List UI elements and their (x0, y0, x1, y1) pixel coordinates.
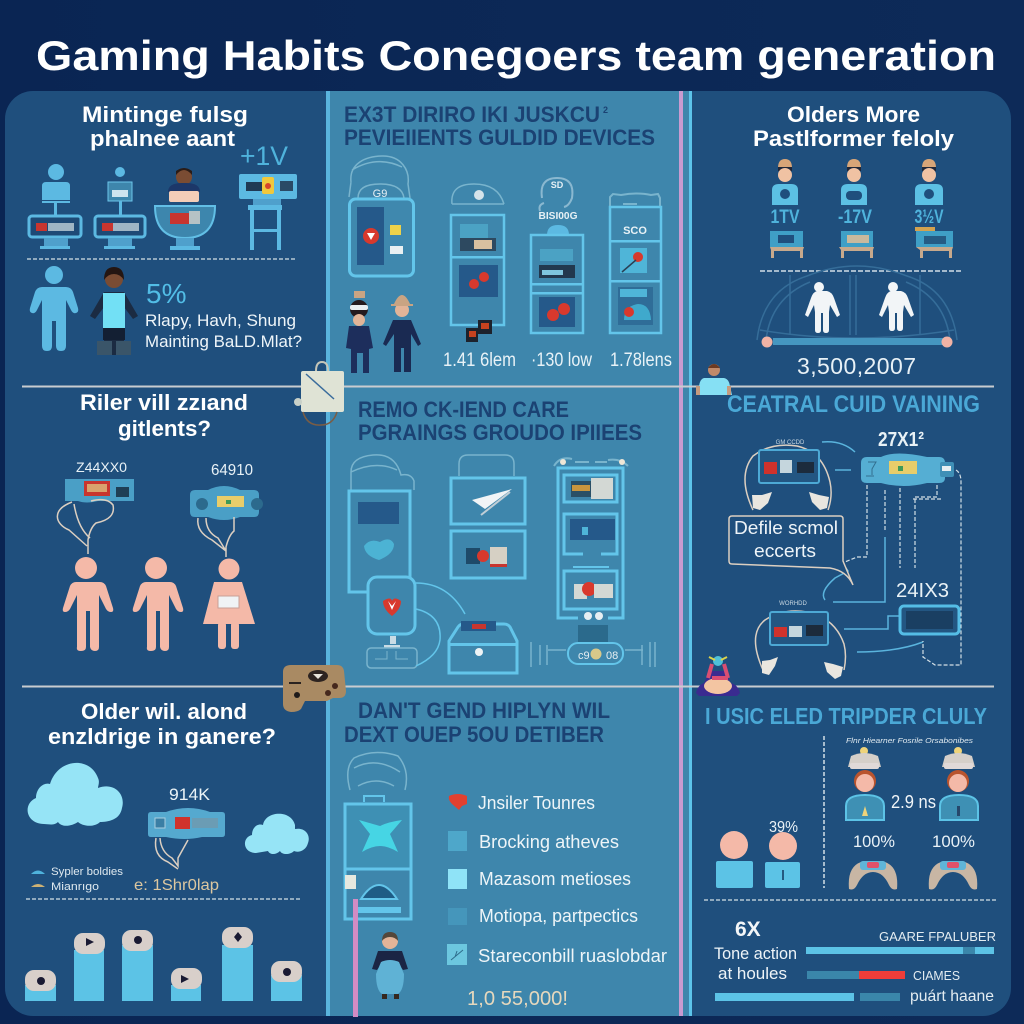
figures with monitors: -17V (838, 207, 872, 228)
icon: dark person (90, 267, 138, 355)
heading (753, 102, 955, 151)
legend (31, 866, 124, 893)
labels: 1.78lens (610, 350, 672, 371)
text block (714, 944, 797, 983)
icon: monitor on stool (239, 174, 297, 250)
device with cable (148, 808, 225, 869)
device 4: SCO (623, 225, 647, 237)
labels: 1.41 6lem (443, 350, 516, 371)
headset device top (745, 440, 831, 510)
text block: at houles (718, 964, 787, 983)
heading: EX3T DIRIRO IKI JUSKCU (344, 102, 600, 127)
item: Mazasom metioses: Mazasom metioses (479, 869, 631, 889)
panel: middle centre (349, 397, 655, 673)
heading (80, 390, 248, 441)
icon: jester figure on divider (696, 656, 740, 696)
tall rack (554, 458, 628, 618)
heading: PEVIEIIENTS GULDID DEVICES (344, 125, 655, 150)
heading: Riler vill zzıand (80, 390, 248, 415)
device with cables 1 (57, 479, 134, 554)
callout (729, 516, 853, 585)
panel: middle left (57, 390, 263, 651)
device with helmet (345, 752, 411, 919)
heading: Pastlformer feloly (753, 126, 955, 151)
panel: bottom right (704, 703, 998, 1005)
panel: bottom middle (344, 698, 667, 1017)
figures: three pink people (63, 557, 255, 651)
legend: Mianrıgo (51, 881, 99, 893)
screen device (900, 606, 959, 634)
title: Gaming Habits Conegoers team generation (36, 32, 996, 79)
stat: 914K: 914K (169, 785, 211, 804)
heading: I USIC ELED TRIPDER CLULY (705, 703, 987, 729)
VR figure right (940, 747, 978, 820)
white figures (805, 282, 914, 333)
icon: figure with monitor 1 (29, 164, 81, 249)
heading (82, 102, 248, 151)
stat: 1,0 55,000! (467, 988, 568, 1010)
text block (145, 311, 302, 351)
labels: Z44XX0 (76, 459, 127, 475)
icon: blue person (30, 266, 78, 351)
device 1 (349, 156, 414, 276)
heading: PGRAINGS GROUDO IPIIEES (358, 420, 642, 445)
central device (861, 454, 954, 486)
figures with monitors (770, 159, 953, 258)
bar labels: puárt haane (910, 988, 994, 1005)
heading: REMO CK-IEND CARE (358, 397, 569, 422)
panel: bottom left (25, 699, 309, 1001)
device 3 (531, 178, 583, 333)
text block: Mainting BaLD.Mlat? (145, 332, 302, 351)
item: Brocking atheves: Brocking atheves (479, 832, 619, 852)
heading: Mintinge fulsg (82, 102, 248, 127)
icon: bag on divider (294, 362, 344, 425)
icon: figure with monitor 2 (95, 167, 145, 249)
stat: 24IX3: 24IX3 (896, 580, 949, 602)
woman figure (372, 932, 408, 999)
heading: DAN'T GEND HIPLYN WIL (358, 698, 610, 723)
pedestal with dials (531, 612, 655, 667)
callout: eccerts (754, 541, 816, 561)
bar chart: horizontal (715, 947, 994, 1001)
bar labels: CIAMES (913, 968, 960, 983)
heading: phalnee aant (90, 126, 236, 151)
callout: Defile scmol (734, 518, 838, 538)
icon: person at bowl (155, 168, 215, 250)
headset device top: GM CCDD (776, 440, 805, 446)
heading (344, 102, 655, 150)
bar labels (879, 929, 996, 1005)
device 4 (610, 194, 661, 333)
text block: Rlapy, Havh, Shung (145, 311, 296, 330)
legend: Sypler boldies (51, 866, 124, 878)
heading: Olders More (787, 102, 920, 127)
pedestal with dials: c9 (578, 650, 590, 662)
bridge arcs (757, 266, 957, 340)
device 3: BISI00G (538, 211, 578, 222)
panel: top right (753, 102, 962, 379)
device 3: SD (551, 180, 564, 190)
two left figures (716, 831, 800, 888)
bar chart (25, 927, 302, 1001)
panel: top left (27, 102, 302, 355)
labels: ·130 low (531, 350, 592, 371)
icon: person on divider (696, 364, 732, 395)
pink post (353, 899, 358, 1017)
text block: Tone action (714, 944, 797, 963)
panel: middle right (727, 391, 980, 679)
helmet cabinet (349, 455, 414, 592)
item: Motiopa, partpectics: Motiopa, partpectics (479, 906, 638, 926)
figures with monitors: 3½V (914, 207, 944, 228)
stat: 2.9 ns: 2.9 ns (891, 792, 936, 812)
item: Jnsiler Tounres: Jnsiler Tounres (478, 793, 595, 813)
device with cables 2 (190, 486, 263, 557)
stat: +1V: +1V (240, 141, 288, 171)
drawer box (449, 621, 517, 673)
icon: game controller on divider (283, 665, 346, 712)
small caption: Flnr Hiearner Fosrile Orsabonibes (846, 738, 974, 745)
stat: 39%: 39% (769, 819, 798, 836)
labels (443, 350, 672, 371)
connectors (822, 442, 923, 652)
stat: 3,500,2007 (797, 353, 916, 379)
heading (358, 397, 642, 445)
heading: gitlents? (118, 416, 211, 441)
labels: 64910 (211, 462, 253, 479)
cloud small (245, 814, 309, 854)
heading (48, 699, 276, 749)
VR figure left (846, 747, 884, 820)
people pair (346, 291, 421, 373)
heading: Older wil. alond (81, 699, 247, 724)
watch device (367, 577, 417, 668)
stats: 100% (853, 832, 975, 851)
stats: 100%: 100% (932, 832, 975, 851)
stats: 100%: 100% (853, 832, 895, 851)
figures with monitors: 1TV (770, 207, 800, 228)
dashed connectors (845, 470, 961, 665)
heading: CEATRAL CUID VAINING (727, 391, 980, 418)
bar labels: GAARE FPALUBER (879, 929, 996, 944)
device 1: G9 (373, 188, 387, 200)
heading: 2 (603, 105, 608, 115)
connector lines (416, 583, 465, 666)
heading (344, 698, 610, 747)
item: Stareconbill ruaslobdar: Stareconbill ruaslobdar (478, 946, 667, 966)
panel: top middle (344, 102, 672, 373)
label: e: 1Shr0lap (134, 877, 219, 894)
stat: 6X: 6X (735, 918, 761, 941)
headset device bottom (755, 601, 846, 679)
paper plane frames (451, 455, 525, 578)
controllers (849, 861, 977, 890)
cloud large (28, 763, 123, 826)
heading: enzldrige in ganere? (48, 724, 276, 749)
pedestal with dials: 08 (606, 650, 618, 662)
heading: DEXT OUEP 5OU DETIBER (344, 722, 604, 747)
legend list (447, 793, 667, 966)
device 2 (451, 184, 504, 342)
headset device bottom: WORHDD (779, 601, 807, 607)
progress bar (762, 336, 952, 348)
stat: 5%: 5% (146, 278, 186, 309)
stat: 27X1: 27X1² (878, 429, 924, 451)
labels (76, 459, 253, 479)
